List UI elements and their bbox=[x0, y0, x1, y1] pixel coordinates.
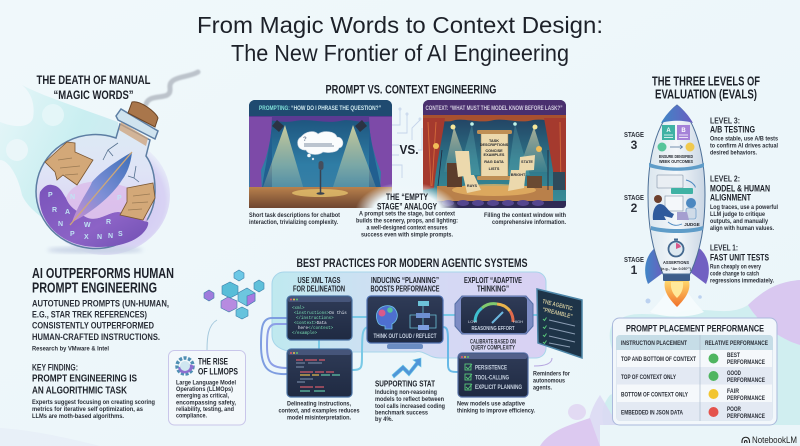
icon: cracked potion bottle: P bbox=[70, 231, 75, 238]
panel: best practices container bbox=[272, 272, 546, 358]
label: stage 3: 3 bbox=[631, 138, 638, 152]
heading: three levels of evaluation: THE THREE LEVELS OF bbox=[652, 74, 760, 88]
text block: supporting stat bbox=[375, 378, 445, 423]
terminal: XML tags: </example> bbox=[292, 331, 318, 336]
icon: cracked potion bottle: N bbox=[70, 194, 75, 201]
icon: upward trend arrow bbox=[392, 358, 421, 378]
caption: calibrate: CALIBRATE BASED ON bbox=[470, 340, 516, 346]
text block: key finding: PROMPT ENGINEERING IS bbox=[32, 372, 137, 384]
row: embedded in JSON data: EMBEDDED IN JSON DATA bbox=[621, 410, 683, 416]
text block: level 3: desired behaviors. bbox=[710, 150, 757, 156]
row: top of context only: GOOD bbox=[727, 370, 741, 377]
text block: level 2: outputs, and manually bbox=[710, 218, 768, 225]
panel: rise of LLMOps: encompassing safety, bbox=[176, 400, 236, 406]
panel: the agentic preamble bbox=[537, 289, 582, 358]
panel: context stage illustration: BRIGHT bbox=[511, 173, 526, 177]
panel: rise of LLMOps: reliability, testing, and bbox=[176, 406, 234, 413]
tile: reasoning effort gauge: LOW bbox=[468, 319, 477, 324]
empty stage analogy fade bbox=[355, 182, 459, 242]
text block: level 3: A/B TESTING bbox=[710, 124, 755, 134]
text block: key finding: AN ALGORITHMIC TASK bbox=[32, 384, 127, 396]
icon: cracked potion bottle: W bbox=[84, 222, 91, 229]
panel: rise of LLMOps: emerging as critical, bbox=[176, 392, 229, 400]
illustration: evaluation rocket: A bbox=[666, 128, 671, 134]
panel: context stage illustration: CONTEXT: “WHAT MUST THE MODEL KNOW BEFORE LASK?” bbox=[426, 105, 562, 112]
text block: level 1 bbox=[710, 242, 774, 284]
caption: adaptive thinking bbox=[457, 400, 535, 414]
heading: use XML tags: FOR DELINEATION bbox=[293, 284, 345, 294]
panel: the agentic preamble: “PREAMBLE” bbox=[542, 307, 573, 320]
heading: best practices: BEST PRACTICES FOR MODERN AGENTIC SYSTEMS bbox=[296, 256, 528, 270]
panel: prompting stage illustration: ? bbox=[303, 137, 307, 143]
label: VS: VS. bbox=[400, 142, 418, 157]
tile: reasoning effort gauge bbox=[455, 296, 533, 334]
text block: AI outperforms human prompt engineering: E.G., STAR TREK REFERENCES) bbox=[32, 310, 147, 320]
caption: context: comprehensive information. bbox=[492, 219, 566, 226]
panel: rise of LLMOps: THE RISE bbox=[198, 356, 228, 366]
panel: rise of LLMOps: Large Language Model bbox=[176, 380, 236, 386]
caption: context bbox=[484, 212, 566, 226]
text block: level 2: Log traces, use a powerful bbox=[710, 204, 778, 211]
icon: cracked potion bottle: A bbox=[65, 209, 70, 216]
heading: prompt vs context engineering: PROMPT VS. CONTEXT ENGINEERING bbox=[326, 82, 496, 96]
panel: prompt placement performance table: INSTRUCTION PLACEMENT bbox=[621, 340, 687, 347]
heading: inducing planning: INDUCING “PLANNING” bbox=[371, 276, 439, 285]
title: From Magic Words to Context Design: bbox=[197, 12, 603, 38]
panel: context stage illustration: EXAMPLES bbox=[484, 153, 505, 157]
text block: key finding: LLMs are moth-based algorithms. bbox=[32, 413, 124, 420]
panel: rise of LLMOps: Operations (LLMOps) bbox=[176, 386, 233, 393]
panel: context stage illustration bbox=[423, 100, 566, 208]
text block: empty stage analogy bbox=[356, 192, 458, 238]
text block: level 2: LLM judge to critique bbox=[710, 211, 765, 218]
label: stage 3: STAGE bbox=[624, 130, 644, 139]
terminal: XML tags bbox=[287, 296, 352, 340]
label: stage 1 bbox=[624, 255, 644, 277]
text block: empty stage analogy: A prompt sets the stage, but context bbox=[359, 210, 456, 218]
icon: cracked potion bottle: R bbox=[52, 207, 57, 214]
panel: context stage illustration: TASK bbox=[489, 139, 499, 143]
tile: checklist: EXPLICIT PLANNING bbox=[475, 384, 522, 391]
caption: prompting: Short task descriptions for chatbot bbox=[249, 212, 341, 219]
heading: exploit adaptive thinking: THINKING” bbox=[477, 284, 509, 294]
caption: reminders: autonomous bbox=[533, 378, 565, 384]
row: bottom of context only: BOTTOM OF CONTEXT ONLY bbox=[621, 392, 688, 398]
caption: adaptive thinking: thinking to improve efficiency. bbox=[457, 408, 535, 414]
panel: rise of LLMOps: OF LLMOPS bbox=[198, 366, 238, 376]
thread from cubes to LLMOps card bbox=[207, 320, 217, 350]
row: bottom of context only: FAIR bbox=[727, 388, 739, 395]
heading: death of manual magic words: THE DEATH OF MANUAL bbox=[36, 75, 150, 87]
text block: empty stage analogy: success even with simple prompts. bbox=[361, 232, 453, 238]
row: bottom of context only bbox=[621, 388, 765, 402]
row: top of context only: PERFORMANCE bbox=[727, 377, 765, 384]
caption: XML tags bbox=[278, 400, 360, 422]
panel: the agentic preamble: THE AGENTIC bbox=[542, 299, 574, 313]
tile: checklist: TOOL-CALLING bbox=[475, 374, 509, 382]
icon: floating cubes bbox=[204, 270, 264, 319]
text block: AI outperforms human prompt engineering: PROMPT ENGINEERING bbox=[32, 280, 157, 296]
text block: AI outperforms human prompt engineering: AI OUTPERFORMS HUMAN bbox=[32, 266, 174, 282]
text block: key finding: KEY FINDING: bbox=[32, 362, 78, 372]
tile: reasoning effort gauge: HIGH bbox=[513, 319, 523, 324]
text block: level 1: LEVEL 1: bbox=[710, 242, 738, 252]
text block: level 2: ALIGNMENT bbox=[710, 192, 751, 202]
text block: AI outperforms human prompt engineering: HUMAN-CRAFTED INSTRUCTIONS. bbox=[32, 332, 160, 343]
text block: level 1: FAST UNIT TESTS bbox=[710, 252, 769, 262]
terminal: XML tags: here</context> bbox=[298, 326, 334, 331]
panel: rise of LLMOps bbox=[168, 350, 246, 425]
label: stage 2: 2 bbox=[631, 201, 638, 215]
terminal: XML tags: </instructions> bbox=[296, 316, 334, 321]
label: stage 3 bbox=[624, 130, 644, 152]
row: top of context only bbox=[621, 370, 765, 384]
caption: calibrate bbox=[470, 340, 516, 352]
caption: XML tags: Delineating instructions, bbox=[287, 400, 351, 408]
text block: level 3: to confirm AI drives actual bbox=[710, 142, 778, 150]
icon: circuit traces behind VS bbox=[392, 108, 422, 178]
panel: context stage illustration: DESCRIPTIONS bbox=[480, 143, 509, 147]
icon: LLMOps gear bbox=[177, 358, 194, 374]
text block: supporting stat: Inducing non-reasoning bbox=[375, 389, 437, 396]
heading: inducing planning: BOOSTS PERFORMANCE bbox=[370, 284, 440, 294]
illustration: evaluation rocket: JUDGE bbox=[684, 222, 700, 227]
icon: cracked potion bottle: P bbox=[48, 192, 53, 199]
panel: context stage illustration: RAYS bbox=[467, 184, 478, 188]
text block: level 3: Once stable, use A/B tests bbox=[710, 136, 778, 142]
icon: cracked potion bottle: S bbox=[118, 231, 123, 238]
heading: three levels of evaluation: EVALUATION (EVALS) bbox=[655, 88, 757, 102]
row: embedded in JSON data: POOR bbox=[727, 406, 741, 413]
text block: empty stage analogy: a well-designed context ensures bbox=[366, 224, 448, 232]
text block: key finding: metrics for iterative self optimization, as bbox=[32, 406, 143, 413]
caption: adaptive thinking: New models use adaptive bbox=[457, 400, 525, 408]
tile: think out loud bbox=[367, 296, 443, 349]
caption: reminders: Reminders for bbox=[533, 370, 570, 378]
panel: prompting stage illustration: PROMPTING: “HOW DO I PHRASE THE QUESTION?” bbox=[259, 105, 381, 112]
text block: supporting stat: SUPPORTING STAT bbox=[375, 378, 436, 388]
heading: death of manual magic words bbox=[36, 75, 150, 102]
text block: supporting stat: by 4%. bbox=[375, 416, 393, 423]
heading: inducing planning bbox=[370, 276, 440, 294]
row: embedded in JSON data: PERFORMANCE bbox=[727, 413, 765, 420]
text block: level 3 bbox=[710, 116, 778, 156]
row: top and bottom of context: PERFORMANCE bbox=[727, 359, 765, 366]
title bbox=[197, 12, 603, 66]
text block: level 1: code change to catch bbox=[710, 270, 759, 278]
text block: key finding bbox=[32, 362, 155, 420]
text block: level 1: Run cheaply on every bbox=[710, 264, 761, 270]
terminal: XML tags: <xml> bbox=[292, 306, 305, 311]
text block: supporting stat: benchmark success bbox=[375, 410, 428, 416]
text block: empty stage analogy: STAGE” ANALOGY bbox=[377, 202, 437, 212]
row: embedded in JSON data bbox=[621, 406, 765, 420]
text block: level 3: LEVEL 3: bbox=[710, 116, 740, 126]
caption: XML tags: context, and examples reduces bbox=[278, 408, 360, 414]
caption: XML tags: model misinterpretation. bbox=[287, 414, 351, 422]
text block: AI outperforms human prompt engineering bbox=[32, 266, 174, 352]
icon: cracked potion bottle: N bbox=[97, 234, 102, 241]
text block: empty stage analogy: THE “EMPTY bbox=[386, 192, 428, 203]
panel: context stage illustration: LISTS bbox=[489, 167, 500, 171]
heading: exploit adaptive thinking: EXPLOIT “ADAPTIVE bbox=[464, 276, 522, 285]
text block: supporting stat: models to reflect between bbox=[375, 396, 444, 403]
icon: cracked potion bottle: R bbox=[106, 219, 111, 226]
illustration: evaluation rocket bbox=[645, 105, 709, 316]
text block: empty stage analogy: builds the scenery, props, and lighting: bbox=[356, 218, 458, 224]
text block: key finding: Experts suggest focusing on creating scoring bbox=[32, 399, 155, 406]
illustration: evaluation rocket: ENSURE DENSIFIED bbox=[659, 154, 694, 159]
heading: use XML tags bbox=[293, 276, 345, 294]
tile: think out loud: THINK OUT LOUD / REFLECT bbox=[374, 334, 437, 340]
panel: prompt placement performance table: RELATIVE PERFORMANCE bbox=[705, 340, 768, 347]
panel: context stage illustration: STATE bbox=[521, 160, 533, 164]
caption: prompting bbox=[249, 212, 341, 226]
panel: context stage illustration: CONCISE bbox=[485, 149, 503, 153]
tile: reasoning effort gauge: REASONING EFFORT bbox=[472, 326, 515, 332]
illustration: evaluation rocket: WEEK OUTCOMES bbox=[659, 159, 693, 164]
tile: checklist bbox=[458, 353, 528, 397]
title: The New Frontier of AI Engineering bbox=[231, 40, 569, 66]
row: top and bottom of context bbox=[621, 352, 765, 366]
caption: reminders: agents. bbox=[533, 384, 552, 392]
label: stage 1: STAGE bbox=[624, 255, 644, 264]
text block: level 1: regressions immediately. bbox=[710, 278, 774, 284]
terminal: XML tags: <context>Data bbox=[294, 321, 327, 326]
label: stage 2: STAGE bbox=[624, 193, 644, 202]
text block: level 2: MODEL & HUMAN bbox=[710, 184, 770, 194]
icon: cracked potion bottle: X bbox=[84, 234, 89, 241]
icon: cracked potion bottle: P bbox=[117, 195, 122, 202]
label: stage 1: 1 bbox=[631, 263, 638, 277]
tile: checklist: PERSISTENCE bbox=[475, 364, 507, 372]
connectors between tiles bbox=[261, 315, 538, 374]
caption: calibrate: QUERY COMPLEXITY bbox=[471, 346, 515, 352]
text block: supporting stat: tool calls increased coding bbox=[375, 403, 445, 410]
text block: AI outperforms human prompt engineering: CONSISTENTLY OUTPERFORMED bbox=[32, 320, 154, 332]
text block: AI outperforms human prompt engineering: Research by VMware & Intel bbox=[32, 346, 109, 352]
text block: level 2: align with human values. bbox=[710, 225, 774, 232]
icon: cracked potion bottle bbox=[36, 72, 198, 254]
panel: prompting stage illustration bbox=[249, 100, 392, 208]
heading: use XML tags: USE XML TAGS bbox=[298, 276, 341, 285]
illustration: evaluation rocket: (e.g., “An 0.05?”) bbox=[661, 266, 692, 271]
icon: cracked potion bottle: N bbox=[108, 233, 113, 240]
heading: three levels of evaluation bbox=[652, 74, 760, 102]
row: bottom of context only: PERFORMANCE bbox=[727, 395, 765, 402]
illustration: evaluation rocket: B bbox=[681, 128, 686, 134]
terminal: XML tags: <instructions>Do this bbox=[294, 311, 347, 316]
text block: AI outperforms human prompt engineering: AUTOTUNED PROMPTS (UN-HUMAN, bbox=[32, 298, 169, 310]
row: top and bottom of context: TOP AND BOTTOM OF CONTEXT bbox=[621, 356, 696, 363]
text block: level 2 bbox=[710, 174, 778, 232]
illustration: evaluation rocket: ASSERTIONS bbox=[663, 260, 690, 266]
row: top and bottom of context: BEST bbox=[727, 352, 740, 359]
panel: prompt placement performance table bbox=[612, 318, 777, 425]
panel: context stage illustration: RAG DATA bbox=[484, 160, 504, 164]
caption: prompting: interaction, trivializing complexity. bbox=[249, 219, 338, 226]
label: stage 2 bbox=[624, 193, 644, 215]
icon: cracked potion bottle: N bbox=[58, 221, 63, 228]
connector to reminders bbox=[534, 358, 552, 366]
row: top of context only: TOP OF CONTEXT ONLY bbox=[621, 374, 676, 381]
text block: level 2: LEVEL 2: bbox=[710, 174, 740, 184]
caption: reminders bbox=[533, 370, 570, 392]
heading: death of manual magic words: “MAGIC WORDS” bbox=[54, 90, 134, 102]
heading: exploit adaptive thinking bbox=[464, 276, 522, 294]
panel: rise of LLMOps: compliance. bbox=[176, 412, 207, 420]
caption: context: Filling the context window with bbox=[484, 212, 566, 219]
terminal: code lines bbox=[287, 349, 352, 397]
